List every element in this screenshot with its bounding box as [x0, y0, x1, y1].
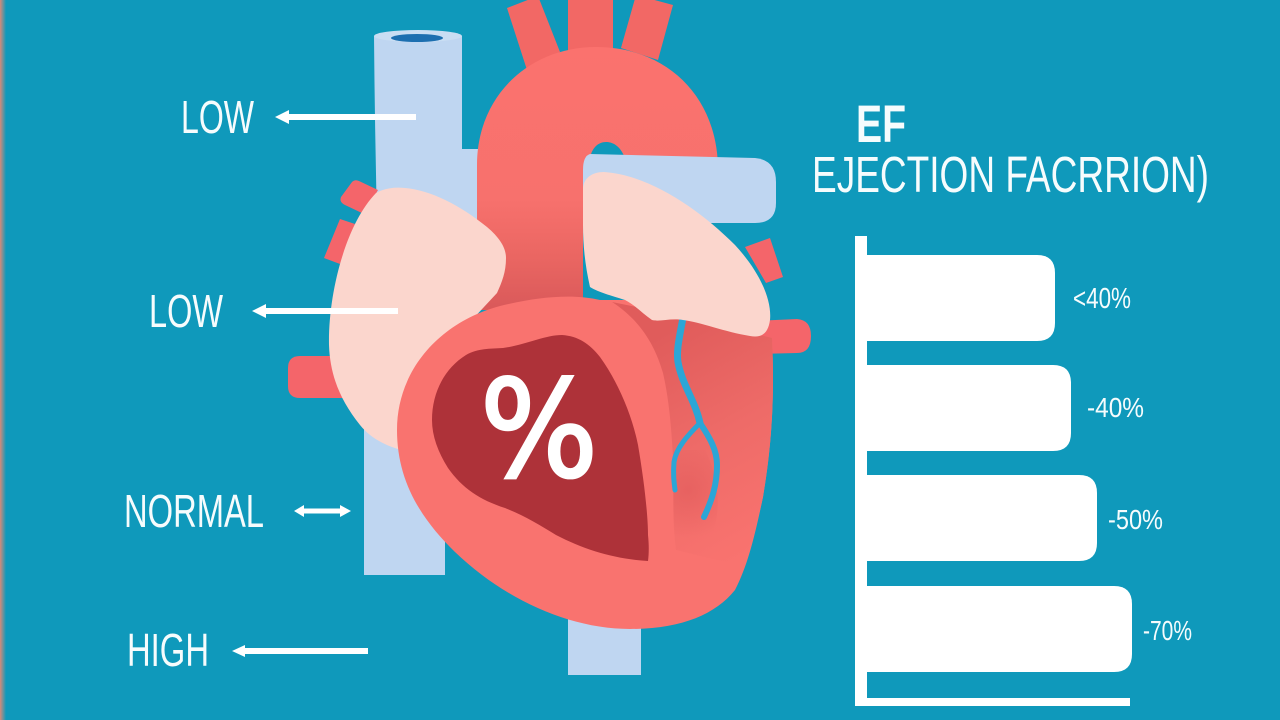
right ventricle — [612, 302, 773, 566]
label: high: HIGH — [127, 624, 209, 676]
top arteries — [507, 0, 673, 70]
left labels — [124, 91, 416, 676]
ventricle shadow — [673, 450, 718, 560]
label: normal: NORMAL — [124, 485, 264, 537]
ventricle chamber — [432, 335, 649, 561]
label: low 2 — [149, 285, 398, 337]
bar 2 — [867, 365, 1144, 451]
axis — [855, 236, 1130, 706]
label: high — [127, 624, 368, 676]
heart muscle silhouette — [397, 297, 773, 629]
bar 1: <40% — [1073, 283, 1131, 315]
side vessels — [288, 180, 811, 398]
label: low 1 — [181, 91, 416, 143]
percent symbol: % — [480, 352, 598, 508]
bar 4 — [867, 586, 1192, 672]
vena cava vessel — [364, 30, 641, 675]
heart illustration — [288, 0, 811, 675]
bar 2: -40% — [1087, 392, 1144, 423]
right atrium — [329, 188, 506, 452]
left atrium — [583, 172, 770, 337]
pulmonary vessel — [583, 154, 776, 223]
bar 4: -70% — [1143, 615, 1192, 646]
label: low 2: LOW — [149, 285, 223, 337]
bar 1 — [867, 255, 1131, 341]
aortic arch — [477, 47, 718, 310]
title: EF — [856, 95, 906, 154]
bar 3 — [867, 475, 1163, 561]
coronary artery — [674, 312, 717, 517]
title — [812, 95, 1209, 203]
bar chart — [855, 236, 1192, 706]
label: low 1: LOW — [181, 91, 254, 143]
bar 3: -50% — [1108, 504, 1163, 535]
